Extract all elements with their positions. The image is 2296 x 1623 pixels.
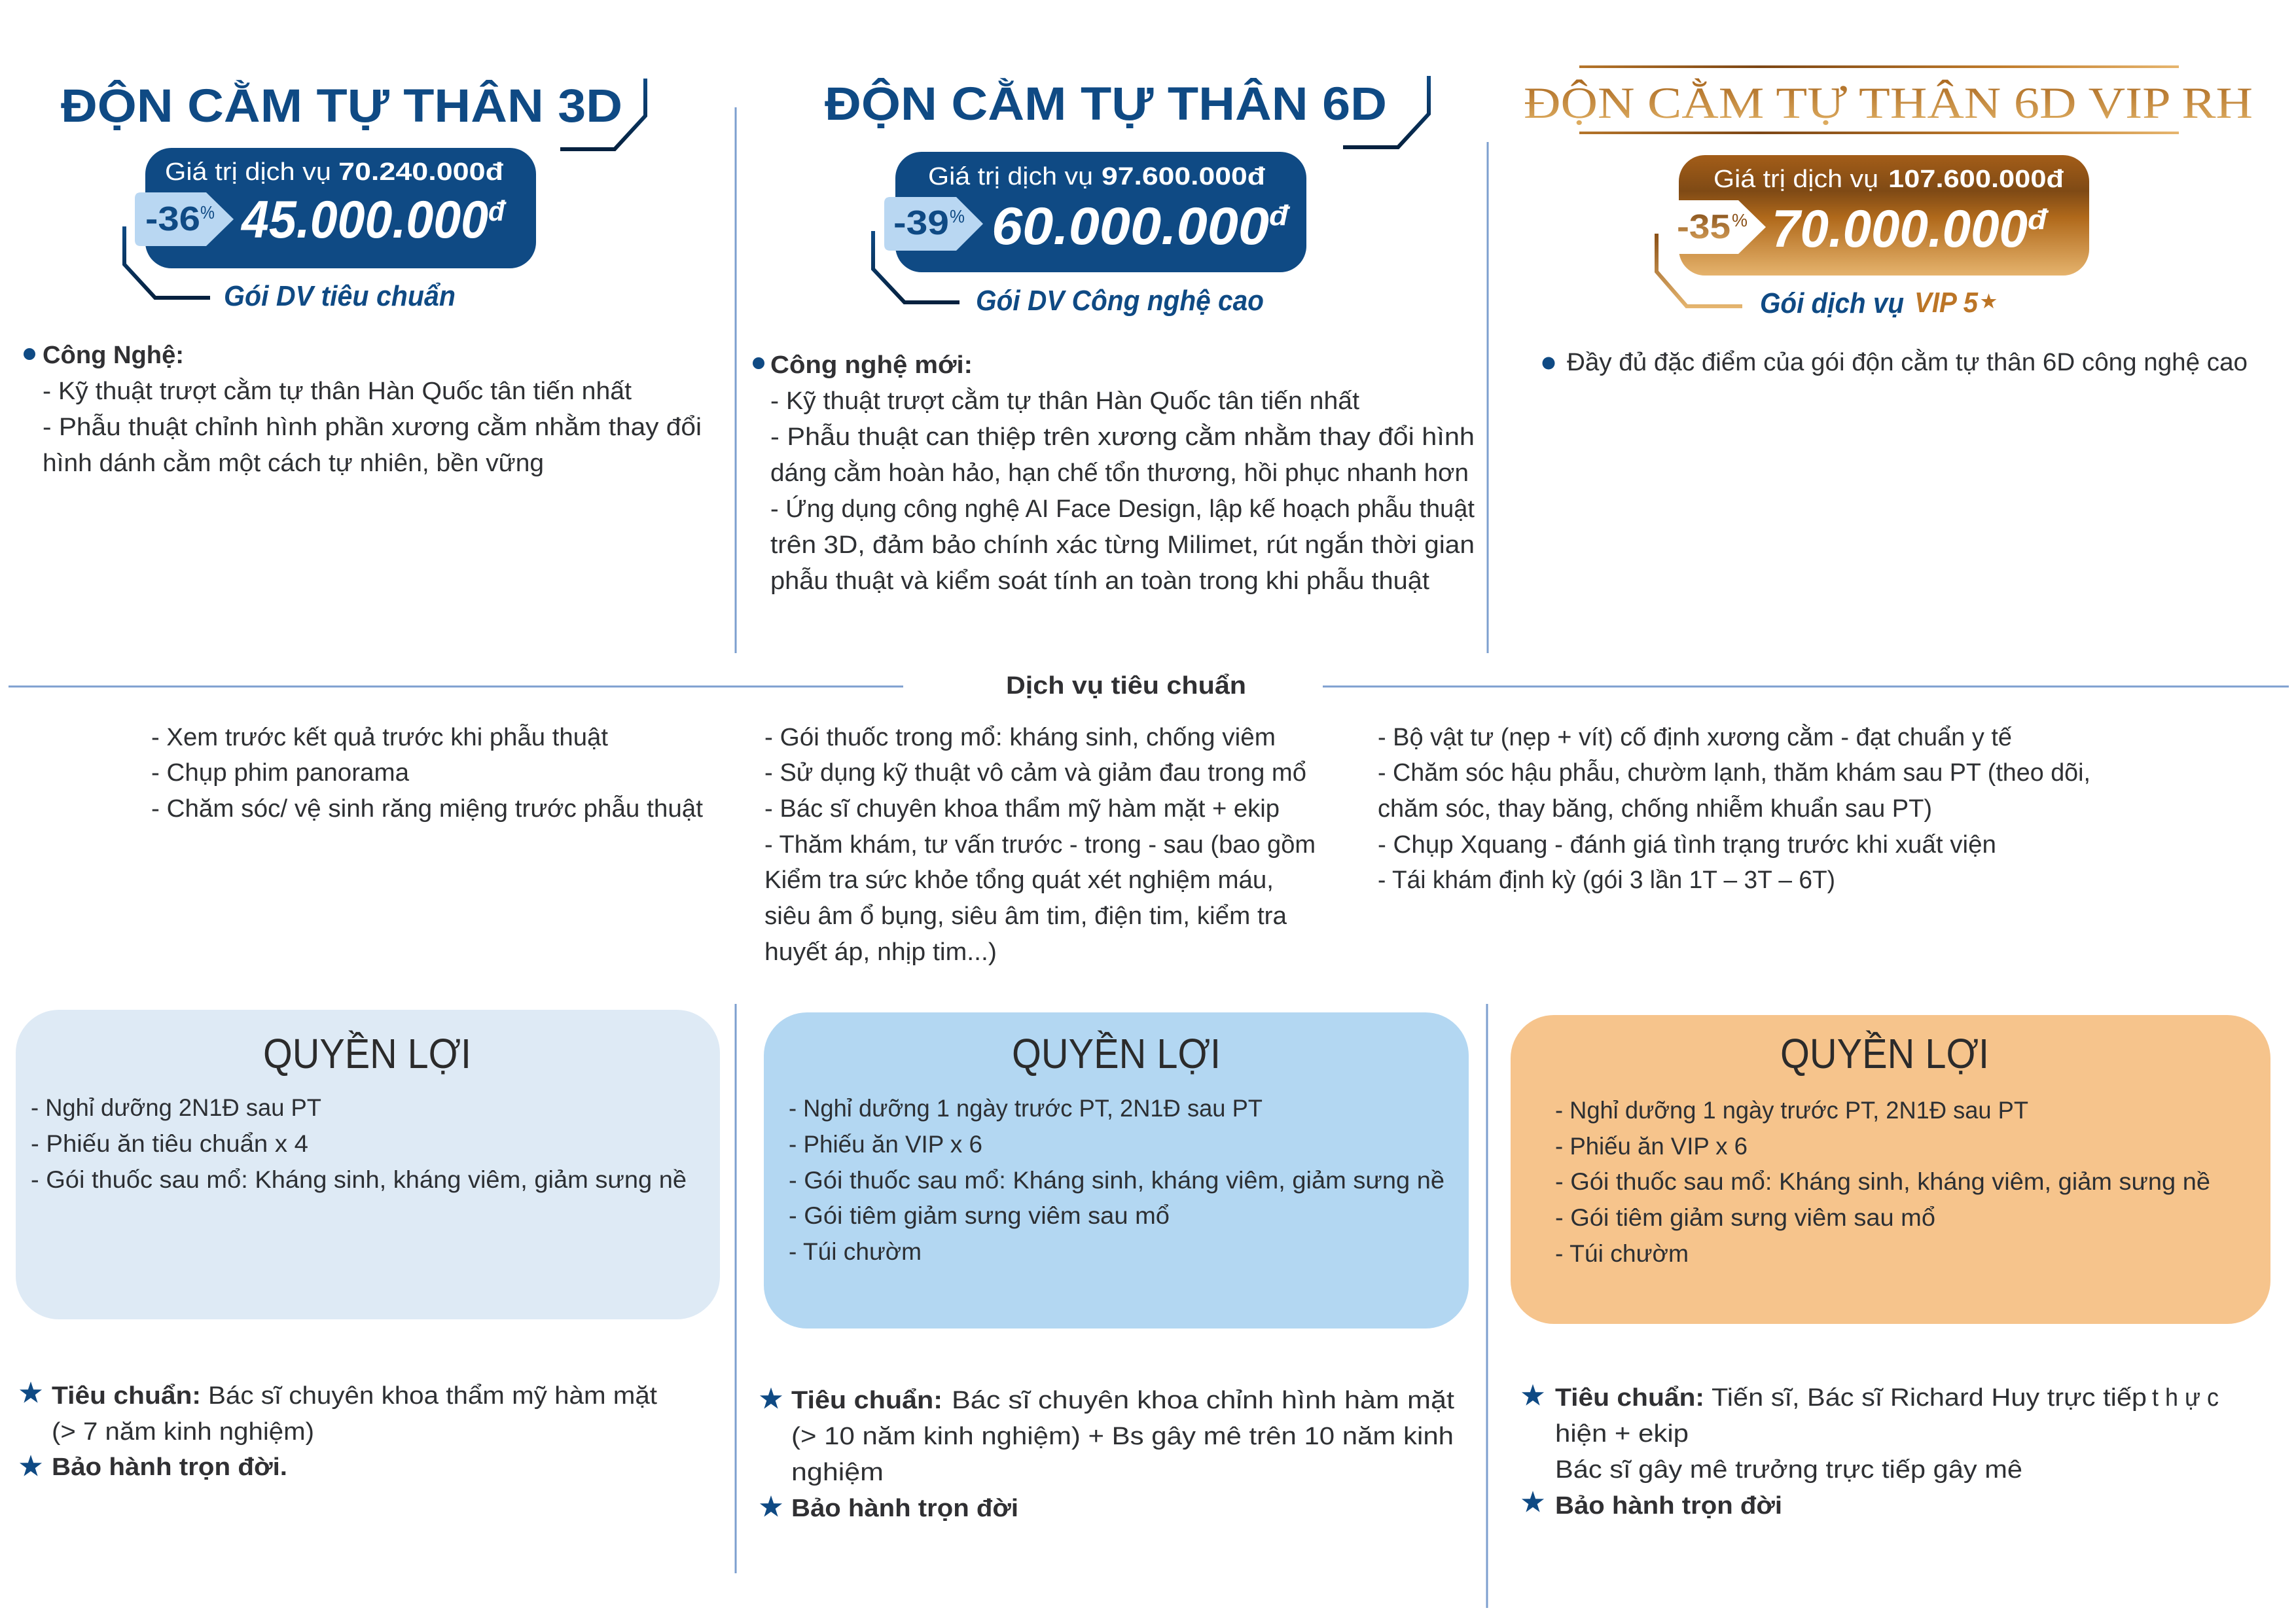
discount tag [884,197,983,251]
original price: Giá trị dịch vụ [1713,166,1878,193]
warranty text: Bảo hành trọn đời [791,1495,1018,1522]
technology bullet [24,348,35,360]
doctor standard text [791,1387,1454,1486]
benefits list: - Phiếu ăn VIP x 6 [789,1131,982,1158]
doctor standard text: Tiêu chuẩn: [791,1387,942,1414]
services column 3: - Chụp Xquang - đánh giá tình trạng trước khi xuất viện [1378,831,1996,859]
gold rule bottom [1579,132,2179,134]
warranty text: Bảo hành trọn đời. [52,1454,287,1481]
original price [928,163,1266,190]
original price: Giá trị dịch vụ [165,158,331,186]
promo price: 45.000.000 [240,190,488,249]
panel: standard services [151,672,2090,966]
benefits list: - Gói thuốc sau mổ: Kháng sinh, kháng viêm, giảm sưng nề [1555,1168,2210,1195]
services column 3: - Bộ vật tư (nẹp + vít) cố định xương cằm - đạt chuẩn y tế [1378,723,2012,751]
services column 2: huyết áp, nhịp tim...) [764,938,997,966]
price box [895,152,1306,272]
services column 2: siêu âm ổ bụng, siêu âm tim, điện tim, kiểm tra [764,902,1287,930]
discount tag [135,192,234,246]
title bracket [560,79,645,149]
discount tag: % [1732,210,1748,230]
services column 2 [764,724,1316,966]
panel: doctor and warranty VIP [1522,1384,2219,1520]
services column 2: - Gói thuốc trong mổ: kháng sinh, chống viêm [764,724,1276,751]
benefits list: - Gói tiêm giảm sưng viêm sau mổ [1555,1204,1935,1231]
panel: benefits 3D [16,1010,720,1319]
doctor standard text: Tiêu chuẩn: [52,1382,201,1410]
left bracket [1657,234,1742,306]
title: 6D package: ĐỘN CẰM TỰ THÂN 6D [825,78,1387,130]
section heading: Dịch vụ tiêu chuẩn [1006,672,1246,700]
discount tag: % [200,202,215,223]
services column 1: - Chụp phim panorama [151,759,410,787]
doctor standard text: t h ự c [2152,1384,2219,1412]
services column 2: - Sử dụng kỹ thuật vô cảm và giảm đau trong mổ [764,759,1306,787]
promo price: 70.000.000 [1772,200,2028,259]
icon: star [1522,1384,1544,1406]
feature text: Đầy đủ đặc điểm của gói độn cằm tự thân 6D công nghệ cao [1567,348,2248,376]
benefits list [789,1095,1444,1265]
doctor standard text: (> 7 năm kinh nghiệm) [52,1418,314,1446]
new technology text: trên 3D, đảm bảo chính xác từng Milimet, rút ngắn thời gian [770,531,1475,559]
original price: Giá trị dịch vụ [928,163,1093,190]
doctor standard text: Tiến sĩ, Bác sĩ Richard Huy trực tiếp [1712,1384,2147,1412]
benefits list [1555,1097,2210,1267]
title: 3D package: ĐỘN CẰM TỰ THÂN 3D [61,80,622,132]
gold rule top [1579,65,2179,68]
discount tag: -36 [145,200,200,238]
benefits heading: QUYỀN LỢI [1012,1030,1221,1077]
package name: Gói dịch vụ [1760,287,1904,319]
discount tag [1676,200,1766,254]
title bracket [1343,76,1429,147]
new technology text: phẫu thuật và kiểm soát tính an toàn trong khi phẫu thuật [770,567,1429,595]
panel: benefits VIP [1511,1015,2270,1324]
new technology text [770,351,1475,595]
original price [1713,166,2064,193]
services column 2: Kiểm tra sức khỏe tổng quát xét nghiệm máu, [764,866,1274,894]
benefits heading: QUYỀN LỢI [1780,1030,1989,1077]
doctor standard text: Bác sĩ chuyên khoa thẩm mỹ hàm mặt [208,1382,657,1410]
promo price: đ [1269,200,1290,232]
price box [145,148,536,268]
benefits list: - Gói thuốc sau mổ: Kháng sinh, kháng viêm, giảm sưng nề [789,1167,1444,1194]
benefits list: - Nghỉ dưỡng 2N1Đ sau PT [31,1094,321,1121]
new technology text: - Kỹ thuật trượt cằm tự thân Hàn Quốc tân tiến nhất [770,387,1359,415]
original price: 97.600.000đ [1102,163,1266,190]
services column 1: - Xem trước kết quả trước khi phẫu thuật [151,723,608,751]
benefits list: - Phiếu ăn tiêu chuẩn x 4 [31,1130,308,1157]
benefits list: - Gói tiêm giảm sưng viêm sau mổ [789,1202,1170,1229]
benefits list: - Túi chườm [1555,1240,1689,1267]
services column 2: - Bác sĩ chuyên khoa thẩm mỹ hàm mặt + ekip [764,795,1280,823]
doctor standard text: Bác sĩ gây mê trưởng trực tiếp gây mê [1555,1456,2022,1484]
discount tag: -35 [1677,208,1731,246]
icon: star [20,1455,42,1476]
promo price: 60.000.000 [992,197,1269,256]
package name: VIP 5 [1914,287,1978,319]
services column 1: - Chăm sóc/ vệ sinh răng miệng trước phẫu thuật [151,794,703,823]
panel: 6D package [753,76,1475,595]
icon: star [760,1387,782,1409]
icon: star [20,1382,42,1403]
services column 2: - Thăm khám, tư vấn trước - trong - sau (bao gồm [764,831,1316,859]
panel: 3D package [24,79,702,477]
benefits list: - Nghỉ dưỡng 1 ngày trước PT, 2N1Đ sau PT [1555,1097,2028,1124]
doctor standard text [52,1382,657,1446]
new technology text: - Ứng dụng công nghệ AI Face Design, lập kế hoạch phẫu thuật [770,495,1475,523]
benefits heading: QUYỀN LỢI [263,1030,471,1077]
panel: doctor and warranty 3D [20,1382,657,1481]
services column 3: - Chăm sóc hậu phẫu, chườm lạnh, thăm khám sau PT (theo dõi, [1378,758,2090,787]
package name: Gói DV Công nghệ cao [976,285,1264,317]
icon: star [760,1495,782,1517]
services column 3 [1378,723,2090,894]
feature bullet [1542,357,1555,369]
doctor standard text: nghiệm [791,1459,884,1486]
original price: 107.600.000đ [1888,166,2064,193]
new technology text: Công nghệ mới: [770,351,973,379]
services column 1 [151,723,703,823]
warranty text: Bảo hành trọn đời [1555,1492,1782,1520]
doctor standard text: Bác sĩ chuyên khoa chỉnh hình hàm mặt [952,1387,1454,1414]
left bracket [873,231,960,302]
panel: doctor and warranty 6D [760,1387,1454,1522]
original price [165,158,504,186]
title: VIP package: ĐỘN CẰM TỰ THÂN 6D VIP RH [1524,78,2253,128]
icon: star [1522,1491,1544,1512]
technology text: - Kỹ thuật trượt cằm tự thân Hàn Quốc tân tiến nhất [43,377,632,405]
technology bullet [753,357,764,369]
original price: 70.240.000đ [338,158,504,186]
technology text: Công Nghệ: [43,342,184,369]
benefits list: - Gói thuốc sau mổ: Kháng sinh, kháng viêm, giảm sưng nề [31,1166,687,1193]
package name: Gói DV tiêu chuẩn [224,280,456,312]
promo price: đ [488,195,507,227]
technology text: - Phẫu thuật chỉnh hình phần xương cằm nhằm thay đổi [43,413,702,441]
left bracket [124,226,210,298]
benefits list: - Nghỉ dưỡng 1 ngày trước PT, 2N1Đ sau PT [789,1095,1263,1122]
package name [1760,287,1996,319]
new technology text: dáng cằm hoàn hảo, hạn chế tổn thương, hồi phục nhanh hơn [770,459,1469,487]
technology text [43,342,702,477]
benefits list: - Túi chườm [789,1238,922,1265]
panel: benefits 6D [764,1012,1469,1329]
doctor standard text: hiện + ekip [1555,1420,1689,1448]
discount tag: -39 [893,204,949,242]
discount tag: % [950,206,965,226]
services column 3: - Tái khám định kỳ (gói 3 lần 1T – 3T – 6T) [1378,866,1835,894]
services column 3: chăm sóc, thay băng, chống nhiễm khuẩn sau PT) [1378,794,1932,823]
doctor standard text [1555,1384,2219,1484]
technology text: hình dánh cằm một cách tự nhiên, bền vững [43,449,544,477]
promo price: đ [2028,204,2049,236]
doctor standard text: (> 10 năm kinh nghiệm) + Bs gây mê trên 10 năm kinh [791,1423,1454,1450]
price box [1679,155,2089,276]
doctor standard text: Tiêu chuẩn: [1555,1384,1704,1412]
benefits list [31,1094,687,1193]
benefits list: - Phiếu ăn VIP x 6 [1555,1133,1748,1160]
panel: 6D VIP RH package [1524,65,2253,376]
new technology text: - Phẫu thuật can thiệp trên xương cằm nhằm thay đổi hình [770,423,1475,451]
